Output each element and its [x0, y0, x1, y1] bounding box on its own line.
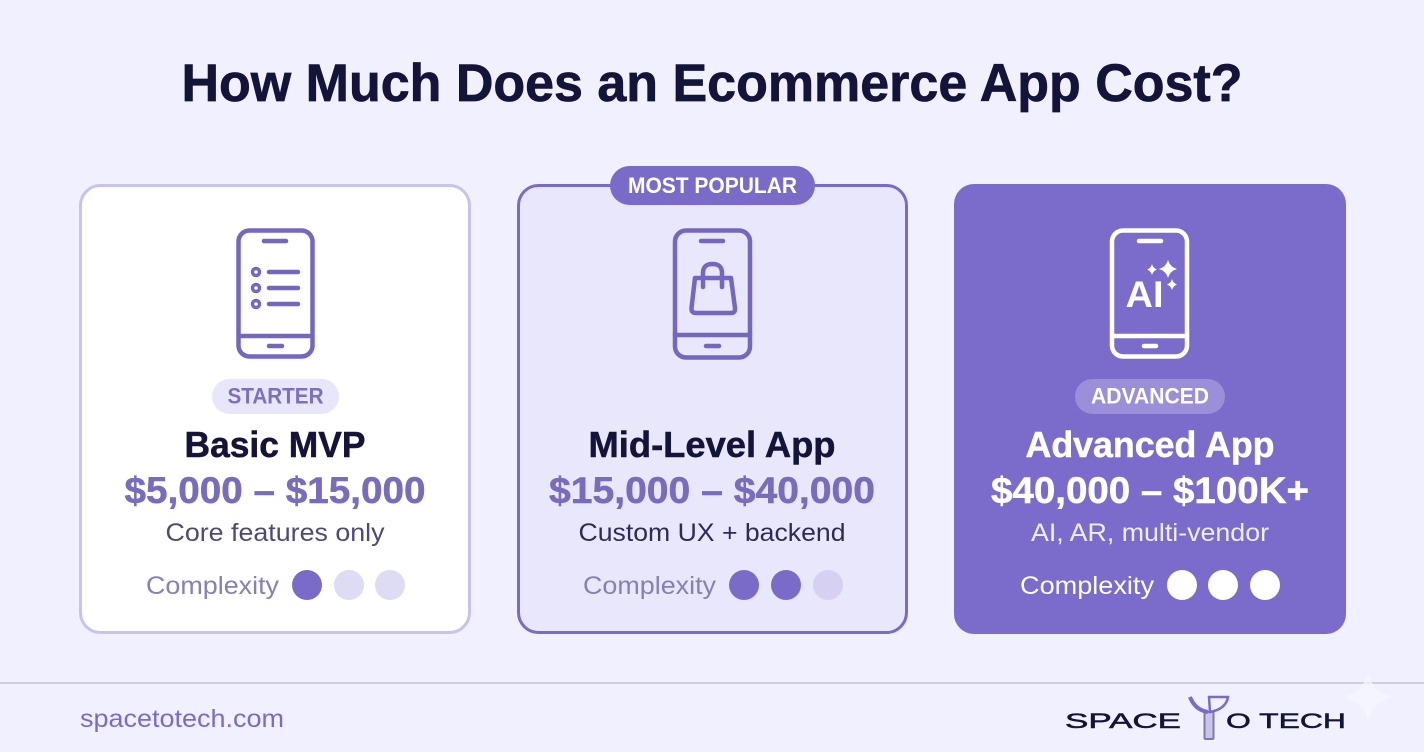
panel: advanced app [954, 184, 1346, 634]
footer website: spacetotech.com [80, 705, 284, 733]
badge: advanced [1075, 379, 1225, 414]
heading: Mid-Level App: Mid-Level App [588, 424, 836, 465]
icon: phone with AI sparkles: AI [1126, 274, 1164, 315]
complexity rating: mid-level: Complexity [583, 572, 717, 600]
icon: phone with checklist [238, 230, 312, 356]
panel: mid-level app [518, 166, 906, 632]
card background [80, 186, 470, 632]
description: mid-level: Custom UX + backend [578, 519, 846, 547]
complexity rating: basic: Complexity [146, 572, 280, 600]
badge: most popular [610, 166, 815, 205]
description: advanced: AI, AR, multi-vendor [1031, 519, 1269, 547]
icon: logo T mark [1190, 697, 1228, 739]
icon: phone with shopping bag [675, 230, 750, 358]
logo: Space To Tech: SPACE [1065, 710, 1181, 733]
badge: starter: STARTER [228, 384, 324, 408]
card background [954, 184, 1346, 634]
complexity rating: advanced: Complexity [1020, 572, 1155, 600]
complexity rating: advanced [1020, 570, 1280, 600]
badge: advanced: ADVANCED [1091, 384, 1209, 408]
icon: phone with AI sparkles [1112, 230, 1187, 356]
description: basic: Core features only [166, 519, 385, 547]
logo: Space To Tech: O TECH [1226, 710, 1346, 733]
title: How Much Does an Ecommerce App Cost? [182, 54, 1242, 113]
heading: Advanced App: Advanced App [1026, 424, 1274, 465]
price: basic: $5,000 – $15,000 [124, 470, 426, 511]
icon: decorative sparkle [1343, 672, 1393, 722]
panel: basic MVP [80, 186, 470, 632]
heading: Basic MVP: Basic MVP [184, 424, 366, 465]
card background [518, 186, 906, 632]
complexity rating: mid-level [583, 570, 843, 600]
badge: most popular: MOST POPULAR [628, 173, 797, 198]
badge: starter [212, 379, 339, 414]
price: mid-level: $15,000 – $40,000 [549, 470, 875, 511]
price: advanced: $40,000 – $100K+ [991, 470, 1309, 511]
complexity rating: basic [146, 570, 405, 600]
logo: Space To Tech [1065, 697, 1346, 739]
